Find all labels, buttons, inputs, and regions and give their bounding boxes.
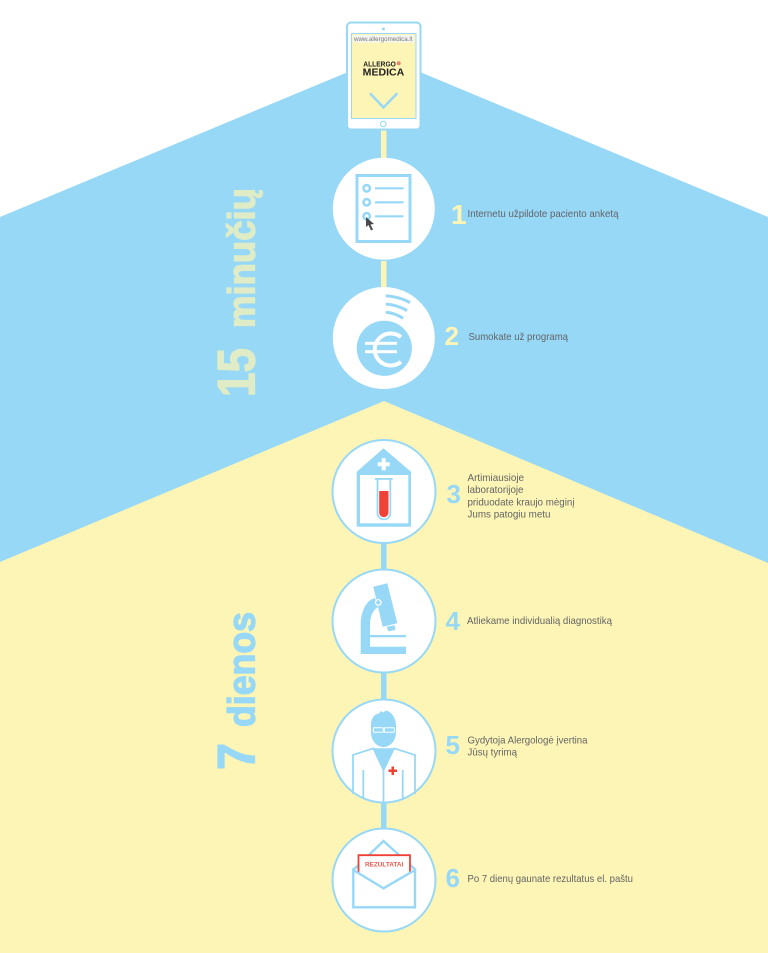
step 1 circle with form icon <box>333 158 435 260</box>
blue background: first stage <box>0 57 768 600</box>
stage label: 15 minučių: minučių <box>222 188 264 328</box>
connector: blue lower line <box>381 543 386 829</box>
icon: tablet with website: ALLERGO <box>363 60 396 69</box>
step 6 circle with envelope icon: REZULTATAI <box>365 863 404 869</box>
step 5 text <box>468 734 588 758</box>
step 4 text: Atliekame individualią diagnostiką <box>467 615 612 627</box>
step 5 text: Gydytoja Alergologė įvertina <box>468 734 588 746</box>
step 4 number: 4 <box>446 606 460 636</box>
stage label: 7 dienos <box>208 612 266 770</box>
icon: tablet with website: www.allergomedica.lt <box>353 36 413 43</box>
step 6 number: 6 <box>446 863 460 893</box>
step 1 number: 1 <box>451 199 467 230</box>
step 3 text: Jums patogiu metu <box>468 508 551 520</box>
step 2 text: Sumokate už programą <box>468 331 568 343</box>
step 2 circle with euro icon <box>333 287 435 389</box>
step 1 text: Internetu užpildote paciento anketą <box>468 208 619 220</box>
step 4 circle with microscope icon <box>332 570 436 672</box>
step 3 text: laboratorijoje <box>468 484 524 496</box>
step 6 circle with envelope icon <box>332 828 436 932</box>
step 3 number: 3 <box>446 479 461 509</box>
step 2 number: 2 <box>444 321 459 351</box>
step 5 number: 5 <box>446 730 460 760</box>
step 6 text: Po 7 dienų gaunate rezultatus el. paštu <box>468 873 633 885</box>
stage label: 15 minučių <box>208 188 266 397</box>
step 3 circle with laboratory icon <box>332 440 436 543</box>
step 3 text: priduodate kraujo mėginį <box>468 496 574 508</box>
icon: tablet with website <box>347 22 420 130</box>
stage label: 7 dienos: dienos <box>222 612 264 727</box>
icon: tablet with website: MEDICA <box>363 66 405 78</box>
yellow background: second stage <box>0 401 768 953</box>
stage label: 7 dienos: 7 <box>208 743 266 770</box>
stage label: 15 minučių: 15 <box>208 348 266 397</box>
step 3 text: Artimiausioje <box>468 472 524 484</box>
step 5 text: Jūsų tyrimą <box>468 746 517 758</box>
step 3 text <box>468 472 574 520</box>
step 5 circle with doctor icon <box>332 700 436 802</box>
connector: yellow upper line <box>381 128 386 287</box>
